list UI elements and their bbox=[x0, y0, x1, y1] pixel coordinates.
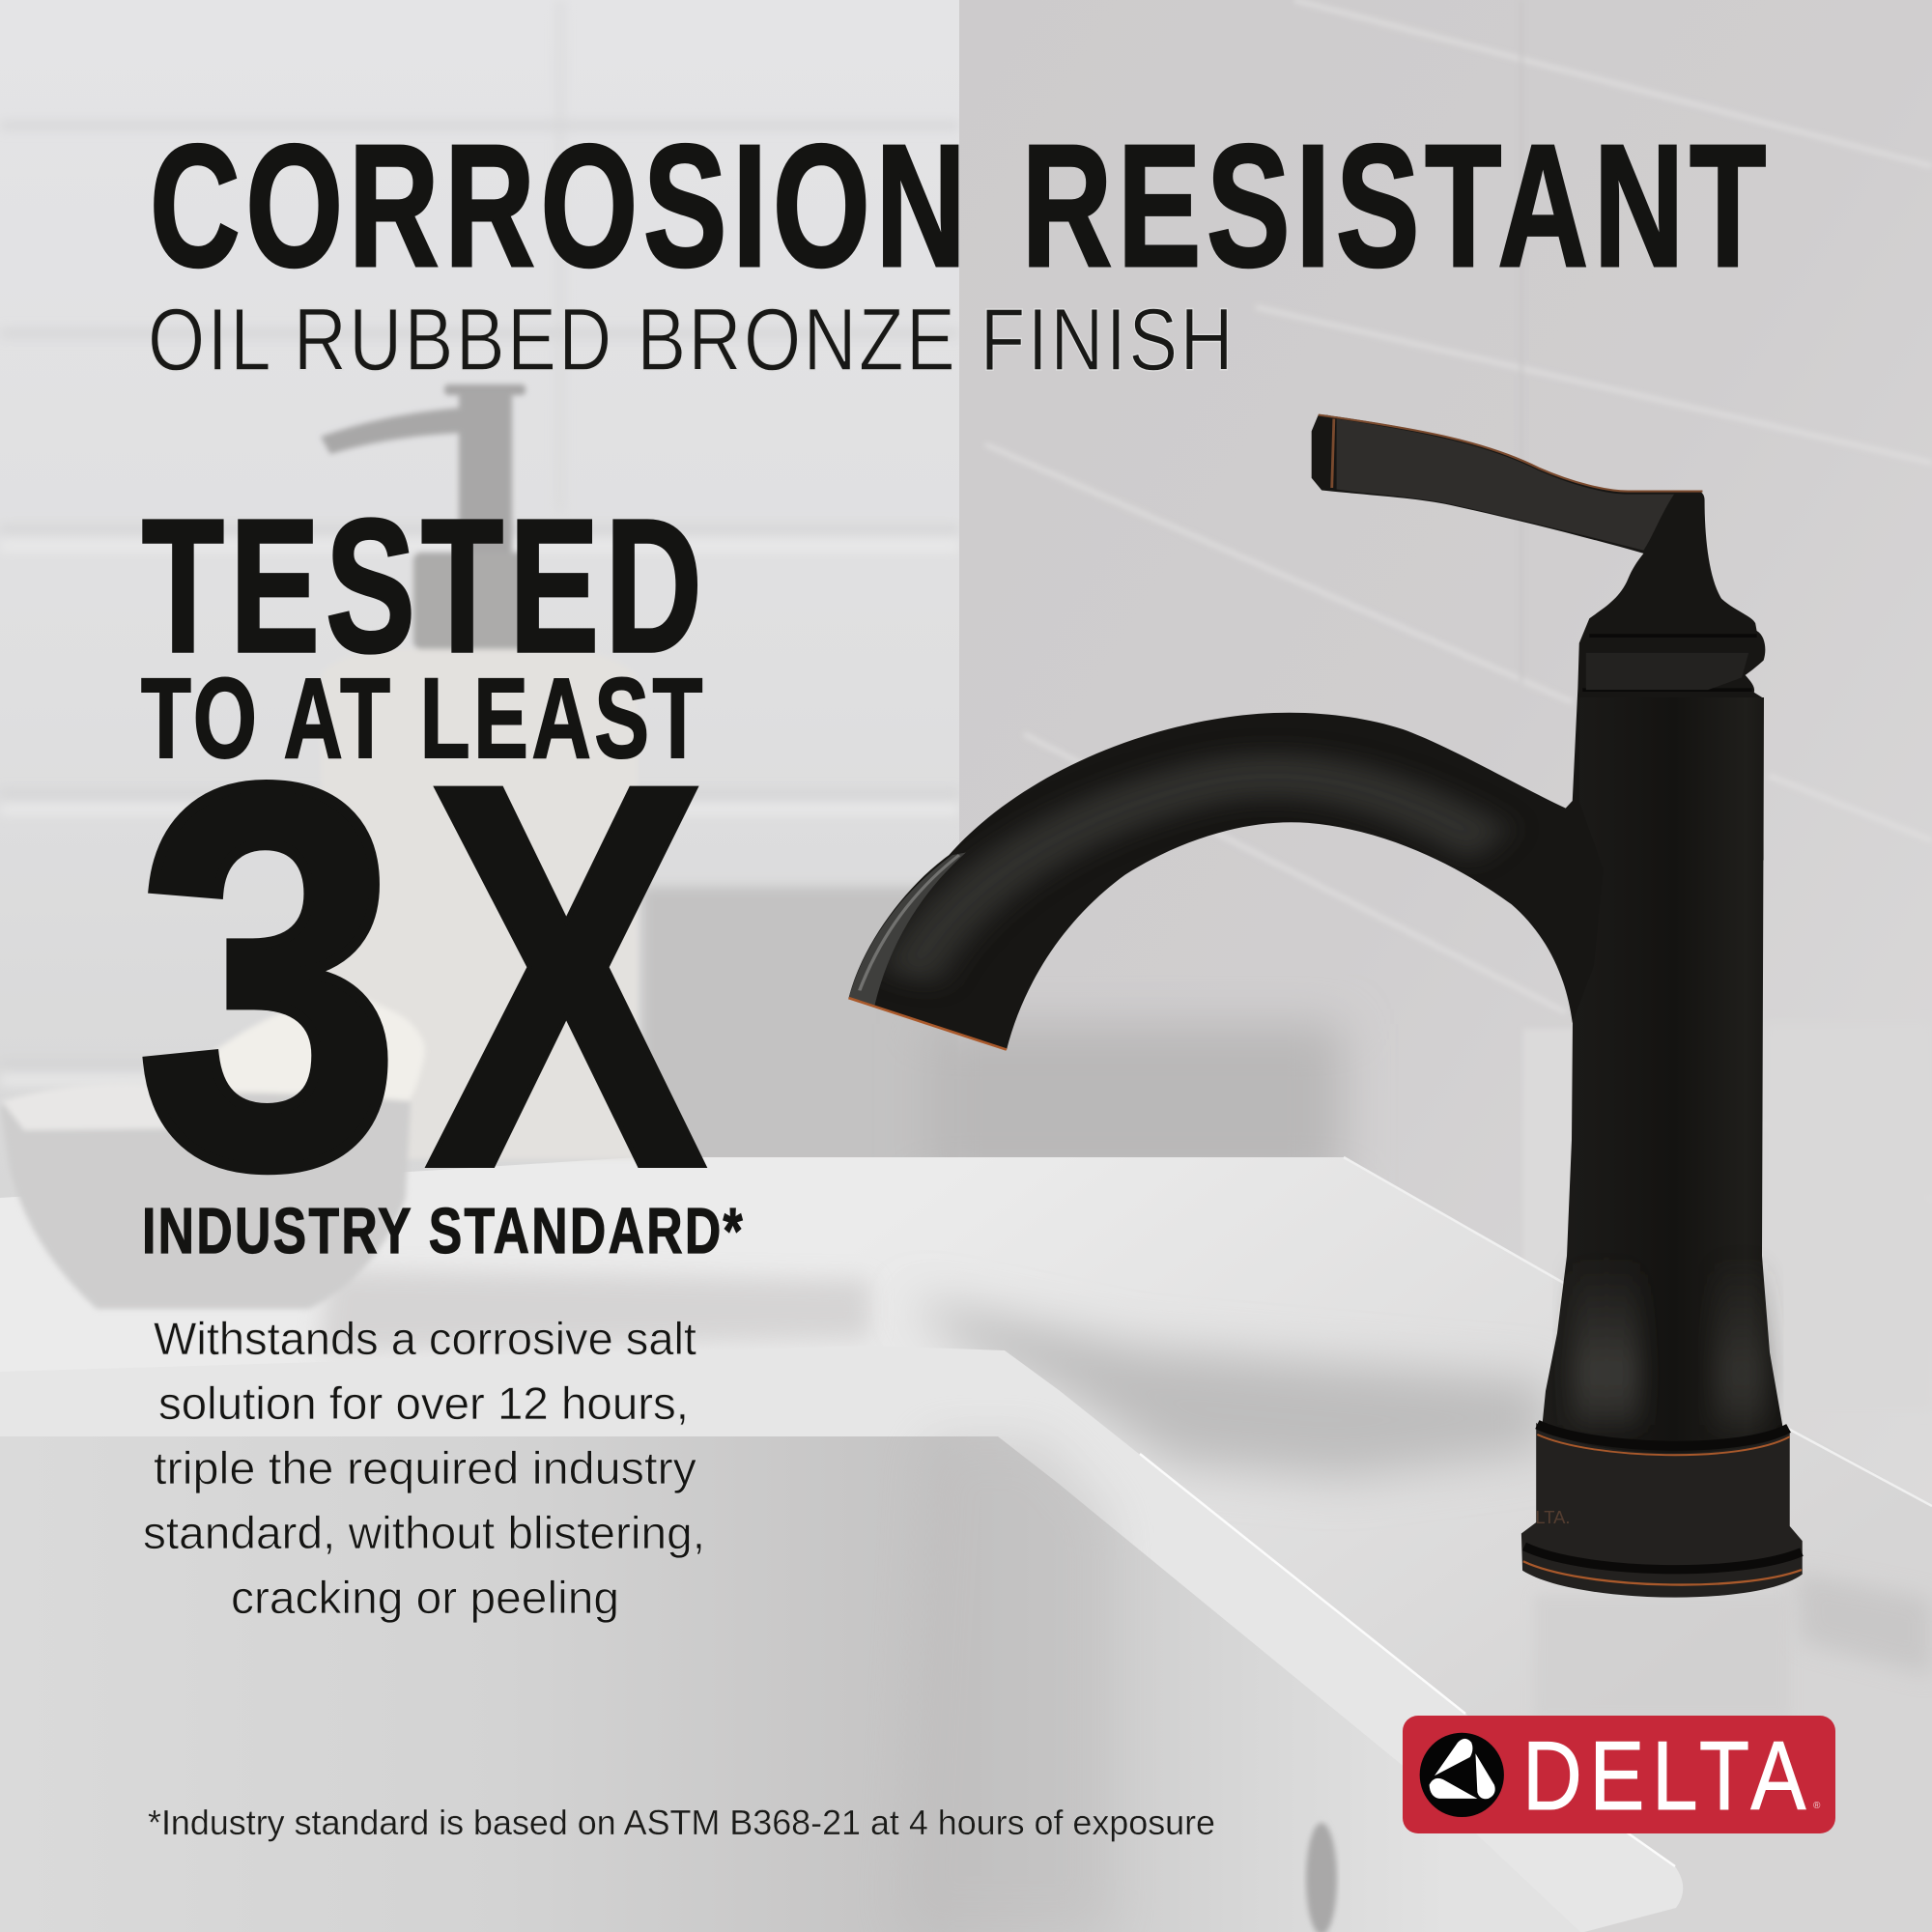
soap flower and bowl bbox=[0, 995, 425, 1309]
faucet base: LTA. bbox=[1535, 1507, 1570, 1527]
overflow drain bbox=[1306, 1823, 1337, 1932]
description paragraph: triple the required industry bbox=[154, 1442, 697, 1493]
faucet base bbox=[1521, 1423, 1803, 1598]
faucet upper: handle, neck, spout bbox=[849, 414, 1765, 1057]
left tiled wall bbox=[0, 0, 961, 1256]
description paragraph: cracking or peeling bbox=[231, 1572, 619, 1623]
description paragraph: standard, without blistering, bbox=[143, 1507, 705, 1558]
faucet bbox=[849, 414, 1803, 1598]
headline: tested: TESTED bbox=[142, 480, 708, 692]
headline: to at least: TO AT LEAST bbox=[141, 655, 706, 782]
logo: Delta bbox=[1403, 1716, 1835, 1833]
spout shading bbox=[908, 776, 1492, 979]
description paragraph bbox=[143, 1313, 705, 1623]
big number: 3X: 3 bbox=[137, 673, 400, 1278]
big number: 3X: X bbox=[425, 670, 709, 1281]
big number: 3X bbox=[137, 670, 709, 1281]
label: industry standard: INDUSTRY STANDARD* bbox=[142, 1195, 745, 1267]
description paragraph: Withstands a corrosive salt bbox=[154, 1313, 696, 1364]
sink lip bbox=[0, 1346, 1683, 1932]
soap dispenser bbox=[321, 384, 638, 1159]
footnote: *Industry standard is based on ASTM B368-21 at 4 hours of exposure bbox=[148, 1803, 1215, 1842]
sink basin bbox=[0, 1436, 1580, 1932]
right tiled wall bbox=[927, 0, 1932, 1546]
counter shadow bbox=[319, 1270, 1932, 1676]
subtitle: OIL RUBBED BRONZE FINISH bbox=[148, 291, 1236, 389]
countertop bbox=[0, 1157, 1932, 1932]
description paragraph: solution for over 12 hours, bbox=[158, 1378, 689, 1429]
faucet reflection bbox=[1534, 1594, 1790, 1719]
icon: Delta triangle mark bbox=[1420, 1733, 1504, 1817]
faucet lower body bbox=[1542, 697, 1783, 1478]
wordmark: DELTA bbox=[1522, 1722, 1813, 1831]
registered mark: ® bbox=[1813, 1801, 1821, 1811]
